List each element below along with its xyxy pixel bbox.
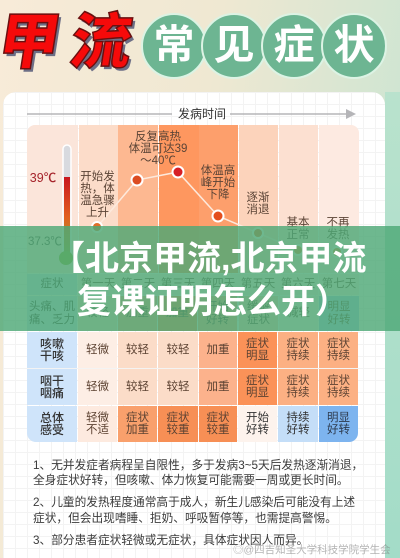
annotation: days 2-3: 体温可达39 [129,143,187,155]
table: symptoms by day: 较重 [206,424,230,436]
annotation: day 1: 上升 [86,207,109,219]
table: symptoms by day: 轻微 [86,344,109,356]
table: symptoms by day: 明显 [246,387,269,399]
table: symptoms by day: 好转 [286,424,310,436]
table: symptoms by day: 好转 [206,314,229,326]
heading: 常见症状 circles: 状 [334,22,374,68]
table: symptoms by day: 咳嗽 [40,336,64,350]
title: 甲流 [0,8,137,76]
heading: 常见症状 circles: 症 [274,22,314,68]
table: symptoms by day: 减轻 [287,307,310,319]
annotation: day 7: 发热 [326,229,350,241]
table: symptoms by day: 持续 [286,387,310,399]
line chart: fever curve [91,166,341,256]
table: symptoms by day: 持续 [327,387,350,399]
table: symptoms by day: 较轻 [86,307,109,319]
heading: 常见症状 circles: 常 [154,22,194,68]
table: symptoms by day: 较轻 [126,344,149,356]
notes: footnotes: 症状，但会出现嗜睡、拒奶、呼吸暂停等，也需提高警惕。 [33,512,337,525]
table: symptoms by day: 较重 [166,424,190,436]
table: symptoms by day: 干咳 [40,349,64,363]
table: symptoms by day: 第四天 [201,278,235,290]
annotation: day 6: 正常 [286,229,310,241]
title: 甲流: 流 [66,8,137,76]
annotation: day 4: 峰开始 [201,177,235,189]
table: symptoms by day: 总体 [40,410,64,424]
table: symptoms by day: 好转 [328,314,350,326]
table: symptoms by day: 感受 [40,423,64,437]
table: symptoms by day: 第六天 [281,278,315,290]
annotation: days 2-3: 反复高热 [135,131,181,143]
annotation: day 1: 热，体 [80,183,115,195]
table: symptoms by day: 较轻 [166,381,190,393]
table: symptoms by day: 持续 [286,350,310,362]
table: symptoms by day [27,277,359,442]
banner: green overlay with headline: 复课证明怎么开） [77,283,349,321]
table: symptoms by day: 加重 [166,307,189,319]
table: symptoms by day: 明显 [328,301,350,313]
annotation: day 4: 体温高 [201,165,235,177]
table: symptoms by day: 较轻 [126,381,149,393]
icon: thermometer [59,144,73,265]
annotation: day 6 [286,216,310,241]
table: symptoms by day: 症状 [286,338,310,350]
annotation: day 5 [246,191,270,216]
notes: footnotes: 1、无并发症者病程呈自限性，多于发病3~5天后发热逐渐消退， [33,459,363,472]
notes: footnotes [33,458,363,547]
table: symptoms by day: 第七天 [322,278,356,290]
table: symptoms by day: 开始 [206,301,229,313]
table: symptoms by day: 症状 [327,374,350,386]
chart: temperature columns [27,125,359,273]
annotation: day 4 [201,164,235,201]
table: symptoms by day: 加重 [206,381,230,393]
table: symptoms by day: 明显 [246,350,269,362]
banner: green overlay with headline [0,226,400,331]
table: symptoms by day: 症状 [40,278,64,290]
table: symptoms by day: 不适 [86,424,109,436]
heading: 常见症状 circles [141,13,387,79]
annotation: day 5: 逐渐 [246,192,270,204]
table: symptoms by day: 症状 [286,374,310,386]
annotation: days 2-3: ～40℃ [140,155,176,167]
right teal strip [385,92,400,558]
table: symptoms by day: 明显 [327,412,350,424]
notes: footnotes: 2、儿童的发热程度通常高于成人，新生儿感染后可能没有上述 [33,496,355,509]
annotation: day 1: 温急骤 [80,195,115,207]
watermark: ◎@四吉知圣大学科技学院学生会 [233,544,391,556]
table: symptoms by day: 缓解 [247,301,270,313]
label: 39℃: 39℃ [30,171,56,185]
heading: 常见症状 circles: 见 [214,22,254,68]
table: symptoms by day: 第三天 [161,278,195,290]
annotation: day 1: 开始发 [80,171,115,183]
table: symptoms by day: 持续 [286,412,310,424]
table: symptoms by day: 开始 [246,412,269,424]
table: symptoms by day: 第二天 [121,278,155,290]
notes: footnotes: 全身症状好转，但咳嗽、体力恢复可能需要一周或更长时间。 [33,474,349,487]
panel: white chart card [3,92,385,558]
table: symptoms by day: 咽干 [40,374,64,388]
axis: 发病时间 with arrow: 发病时间 [178,107,226,121]
table: symptoms by day: 症状 [206,412,230,424]
banner: green overlay with headline: 【北京甲流,北京甲流 [51,240,366,278]
table: symptoms by day: 加重 [126,424,149,436]
table: symptoms by day: 痛、乏力 [29,314,75,326]
table: symptoms by day: 加重 [126,307,149,319]
table: symptoms by day: 症状 [327,338,350,350]
annotation: days 2-3 [129,130,187,167]
table: symptoms by day: 症状 [247,314,270,326]
table: symptoms by day: 轻微 [86,381,109,393]
table: symptoms by day: 较轻 [166,344,190,356]
table: symptoms by day: 咽痛 [40,386,64,400]
notes: footnotes: 3、部分患者症状轻微或无症状，具体症状因人而异。 [33,534,308,547]
table: symptoms by day: 症状 [246,374,269,386]
table: symptoms by day: 第一天 [81,278,115,290]
table: symptoms by day: 好转 [327,424,350,436]
annotation: day 6: 基本 [286,217,310,229]
axis: 发病时间 with arrow [27,107,356,121]
label: 37.3℃: 37.3℃ [28,236,62,248]
annotation: day 4: 下降 [206,189,230,201]
annotation: day 5: 消退 [246,204,270,216]
annotation: day 7: 不再 [326,217,350,229]
table: symptoms by day: 持续 [327,350,350,362]
annotation: day 7 [326,217,350,241]
annotation: day 1 [80,170,115,219]
table: symptoms by day: 症状 [246,338,269,350]
table: symptoms by day: 轻微 [86,412,109,424]
table: symptoms by day: 头痛、肌 [29,301,75,313]
table: symptoms by day: 症状 [166,412,190,424]
table: symptoms by day: 症状 [126,412,149,424]
table: symptoms by day: 第五天 [241,278,275,290]
table: symptoms by day: 好转 [246,424,269,436]
table: symptoms by day: 加重 [206,344,230,356]
